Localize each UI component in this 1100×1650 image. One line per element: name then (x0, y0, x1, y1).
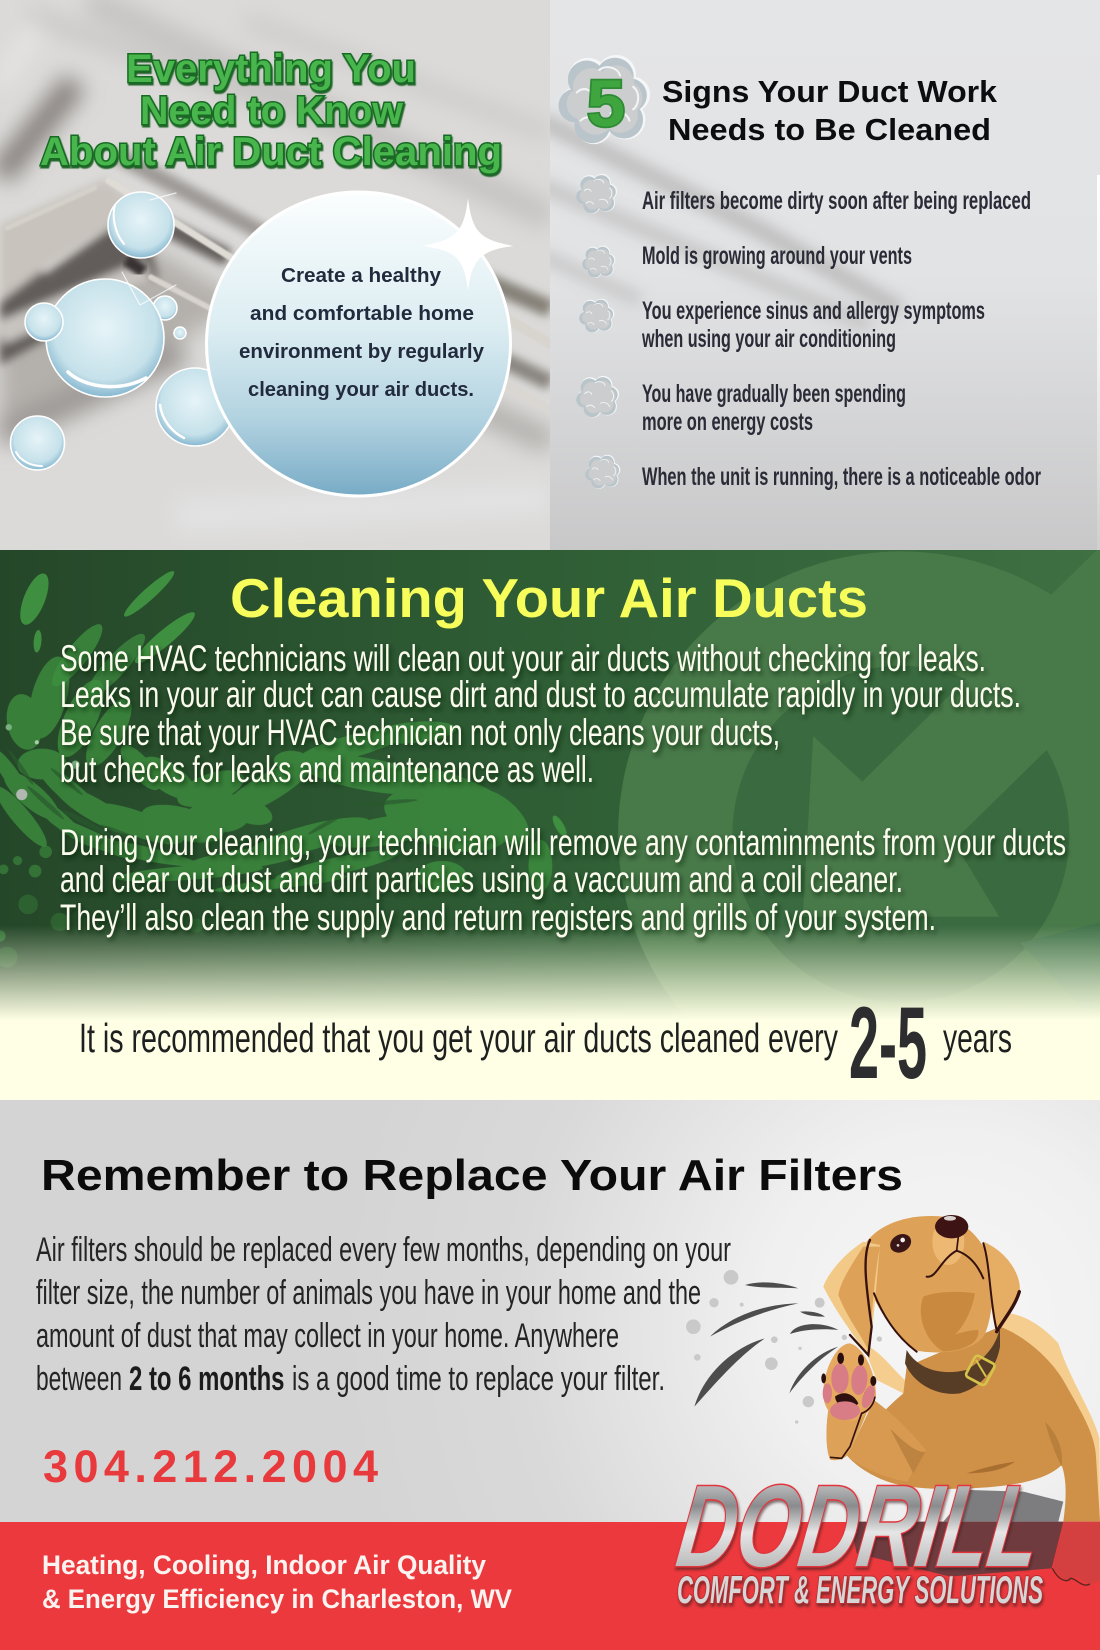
list text: You have gradually been spending (642, 380, 906, 408)
panel: right background (540, 0, 1100, 550)
text block: filter advice: filter size, the number of animals you have in your home and the (36, 1274, 701, 1312)
callout: recommended frequency (79, 986, 1012, 1100)
list text: more on energy costs (642, 408, 813, 436)
footer text: & Energy Efficiency in Charleston, WV (42, 1584, 512, 1614)
list text: when using your air conditioning (641, 325, 896, 353)
number: 2-5: 2-5 (849, 986, 927, 1100)
panel: filters background (0, 1100, 1100, 1522)
dog collar (905, 1327, 1000, 1394)
callout: bubble message: and comfortable home (250, 303, 474, 325)
title: About Air Duct Cleaning (40, 130, 502, 174)
icon: cloud 5 (585, 455, 620, 489)
icon: circular arrow watermark (618, 550, 1100, 988)
dog paw (821, 1343, 877, 1458)
callout: bubble message: cleaning your air ducts. (248, 379, 474, 401)
icon: green leaf splash (0, 567, 569, 968)
text block: cleaning explanation (60, 638, 1066, 938)
text block: cleaning explanation: Be sure that your HVAC technician not only cleans your ducts, (60, 712, 780, 753)
callout: bubble message: environment by regularly (239, 341, 485, 363)
heading: cleaning your air ducts: Cleaning Your Air Ducts (230, 567, 868, 629)
footer text (42, 1550, 512, 1614)
text block: filter advice: between (36, 1360, 122, 1398)
dog body (997, 1313, 1100, 1523)
text block: filter advice: is a good time to replace your filter. (292, 1360, 665, 1398)
text block: filter advice (36, 1231, 731, 1398)
heading: signs: Needs to Be Cleaned (668, 112, 991, 147)
dog ears (823, 1242, 880, 1355)
text block: filter advice: 2 to 6 months (129, 1360, 284, 1398)
icon: cloud 4 (576, 376, 619, 418)
text block: filter advice: Air filters should be replaced every few months, depending on your (36, 1231, 731, 1269)
callout: bubble message (206, 192, 514, 496)
icon: cloud 3 (579, 299, 614, 333)
icon: dog scratching (821, 1215, 1100, 1585)
ground shadow and lower paw (943, 1490, 1063, 1522)
icon: cloud 1 (576, 174, 617, 214)
footer text: Heating, Cooling, Indoor Air Quality (42, 1550, 486, 1580)
callout: recommended frequency: years (943, 1015, 1012, 1061)
title: Everything You (126, 47, 416, 91)
panel: cleaning background (0, 546, 1100, 1117)
dog head (863, 1216, 993, 1352)
heading: remember to replace: Remember to Replace Your Air Filters (41, 1151, 903, 1200)
panel: vent photo background (0, 0, 550, 550)
list text: Mold is growing around your vents (642, 242, 912, 270)
title (40, 47, 502, 174)
heading: signs (662, 74, 998, 147)
text block: cleaning explanation: but checks for leaks and maintenance as well. (60, 749, 594, 790)
icon: cloud 2 (582, 246, 615, 278)
dog front leg (827, 1400, 926, 1482)
icon: small bubbles (10, 192, 234, 470)
icon: cloud with number 5: 5 (587, 66, 625, 140)
icon: cloud with number 5 (558, 55, 650, 144)
icon: dust spray (686, 1270, 882, 1424)
callout: bubble message: Create a healthy (281, 265, 442, 287)
dog face (935, 1215, 968, 1238)
list text (641, 187, 1041, 491)
panel: footer band (0, 1522, 1100, 1650)
dark leaf accents (7, 749, 418, 846)
list: signs (576, 174, 1041, 491)
title: Need to Know (140, 89, 404, 133)
phone number: 304.212.2004 (43, 1441, 378, 1492)
icon: sparkle (421, 198, 514, 291)
heading: signs: Signs Your Duct Work (662, 74, 998, 109)
text block: filter advice: amount of dust that may collect in your home. Anywhere (36, 1317, 619, 1355)
